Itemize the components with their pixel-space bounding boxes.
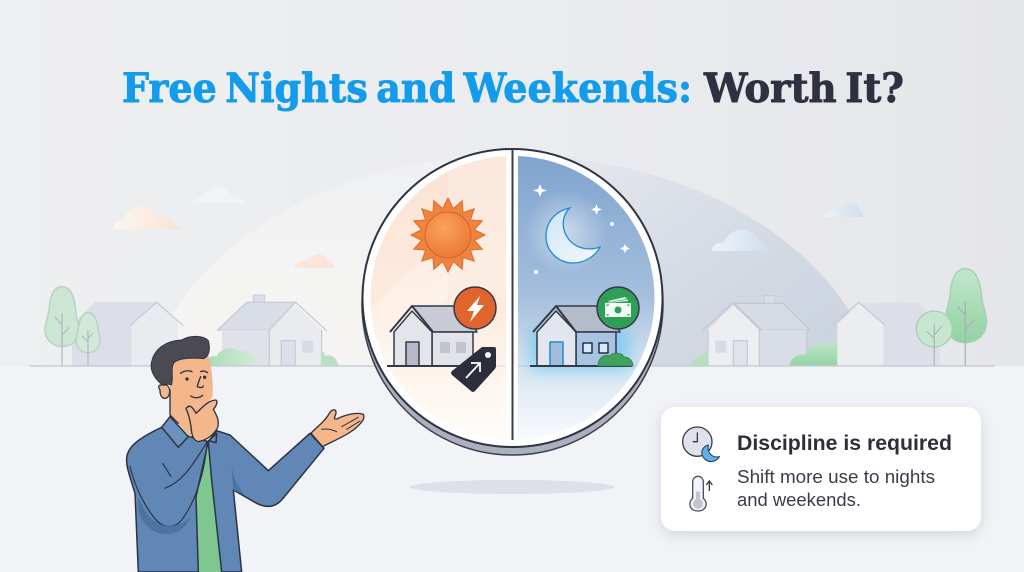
icon: sun: [411, 198, 485, 272]
shirt: [195, 447, 223, 572]
tall left tree: [45, 287, 79, 366]
day half: [370, 156, 506, 426]
night half: [518, 156, 654, 436]
right village scene: [691, 269, 987, 366]
callout card: [661, 407, 981, 531]
left village scene: [45, 287, 338, 366]
tall right tree: [945, 269, 987, 366]
title: Free Nights and Weekends:: [122, 65, 692, 112]
title: Worth It?: [703, 65, 904, 112]
icons: stars: [533, 184, 630, 274]
callout body text: [737, 467, 935, 510]
icon: green cash badge: [597, 287, 639, 329]
small left tree: [76, 313, 100, 366]
second right farmhouse: [833, 302, 940, 366]
callout body text: and weekends.: [737, 490, 861, 510]
icon: crescent moon: [524, 190, 608, 274]
neck and face: [159, 353, 213, 437]
facial features: [181, 371, 208, 398]
clouds: [113, 187, 863, 268]
icon: clock with moon: [683, 427, 719, 462]
far-left farmhouse: [72, 302, 183, 366]
day house: [387, 306, 477, 366]
first right house: [691, 296, 810, 366]
ground line: [29, 365, 995, 367]
bush beside night house: [598, 353, 633, 366]
night house glow: [530, 330, 630, 372]
open hand: [311, 410, 364, 447]
round right tree: [916, 311, 952, 366]
callout heading: Discipline is required: [737, 432, 952, 455]
callout body text: Shift more use to nights: [737, 467, 935, 487]
icon: orange lightning badge: [454, 287, 496, 329]
jacket shadows: [138, 467, 245, 534]
ground shadow under circle: [410, 480, 614, 494]
center divider: [512, 149, 514, 440]
thinking hand: [186, 400, 218, 442]
jacket: [127, 417, 324, 572]
night house: [530, 306, 632, 366]
second left house: [218, 295, 327, 366]
background dome: day and night halves: [178, 163, 850, 366]
person pointing at the circle: [127, 336, 364, 572]
second right bushes: [790, 342, 838, 366]
day versus night circle: [350, 149, 664, 455]
hair: [151, 336, 209, 385]
icon: thermometer with up arrow: [690, 476, 712, 511]
icon: price tag with up arrow: [451, 347, 496, 392]
left bushes: [206, 348, 338, 366]
